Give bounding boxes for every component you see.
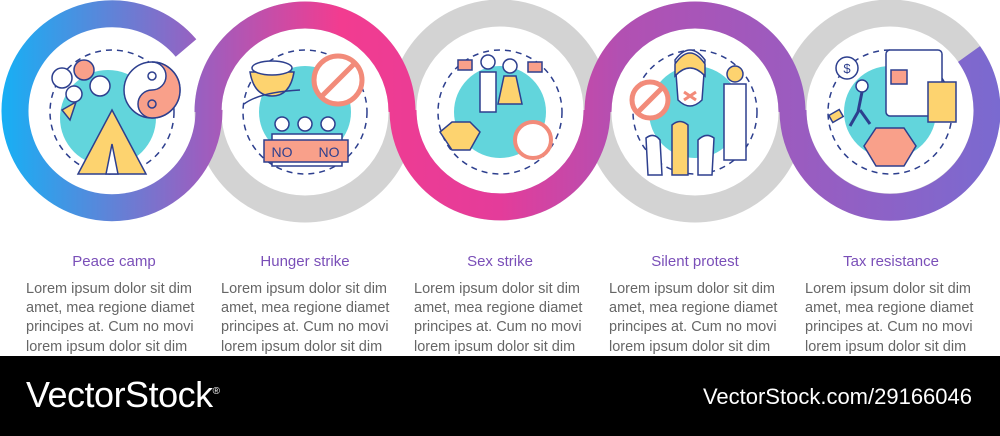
column: hunger strike: Hunger strike: [260, 253, 350, 270]
column: hunger strike: Lorem ipsum dolor sit dim: [221, 281, 387, 297]
column: hunger strike: [221, 253, 390, 355]
icon: tax resistance: $: [843, 61, 851, 76]
column: peace camp: amet, mea regione diamet: [26, 300, 194, 316]
icon: tax resistance: [828, 50, 956, 174]
column: tax resistance: principes at. Cum no movi: [805, 319, 973, 335]
column: silent protest: lorem ipsum dolor sit dim: [609, 339, 770, 355]
column: peace camp: [26, 253, 194, 355]
column: sex strike: lorem ipsum dolor sit dim: [414, 339, 575, 355]
column: sex strike: amet, mea regione diamet: [414, 300, 582, 316]
icon: peace camp: [50, 50, 180, 174]
column: tax resistance: [805, 253, 974, 355]
watermark bar: [0, 356, 1000, 436]
column: silent protest: amet, mea regione diamet: [609, 300, 777, 316]
column: hunger strike: amet, mea regione diamet: [221, 300, 389, 316]
watermark bar: VectorStock.com/29166046: [703, 384, 972, 409]
icon: hunger strike: NO: [318, 144, 340, 160]
column: sex strike: [414, 253, 582, 355]
column: sex strike: Sex strike: [467, 253, 533, 270]
column: peace camp: Peace camp: [72, 253, 156, 270]
column: peace camp: Lorem ipsum dolor sit dim: [26, 281, 192, 297]
column: silent protest: principes at. Cum no movi: [609, 319, 777, 335]
column: silent protest: [609, 253, 778, 355]
column: peace camp: lorem ipsum dolor sit dim: [26, 339, 187, 355]
column: sex strike: principes at. Cum no movi: [414, 319, 582, 335]
icon: silent protest: [632, 50, 757, 175]
column: hunger strike: principes at. Cum no movi: [221, 319, 389, 335]
column: hunger strike: lorem ipsum dolor sit dim: [221, 339, 382, 355]
column: tax resistance: lorem ipsum dolor sit dim: [805, 339, 966, 355]
column: peace camp: principes at. Cum no movi: [26, 319, 194, 335]
icon: sex strike: [438, 50, 562, 174]
watermark bar: VectorStock®: [26, 374, 219, 415]
column: tax resistance: Lorem ipsum dolor sit dim: [805, 281, 971, 297]
column: silent protest: Silent protest: [651, 253, 739, 270]
column: tax resistance: amet, mea regione diamet: [805, 300, 973, 316]
icon: hunger strike: NO: [272, 144, 293, 160]
column: silent protest: Lorem ipsum dolor sit dim: [609, 281, 775, 297]
ribbon diagram: [1, 0, 1000, 222]
column: tax resistance: Tax resistance: [843, 253, 939, 270]
column: sex strike: Lorem ipsum dolor sit dim: [414, 281, 580, 297]
icon: hunger strike: [243, 50, 367, 174]
